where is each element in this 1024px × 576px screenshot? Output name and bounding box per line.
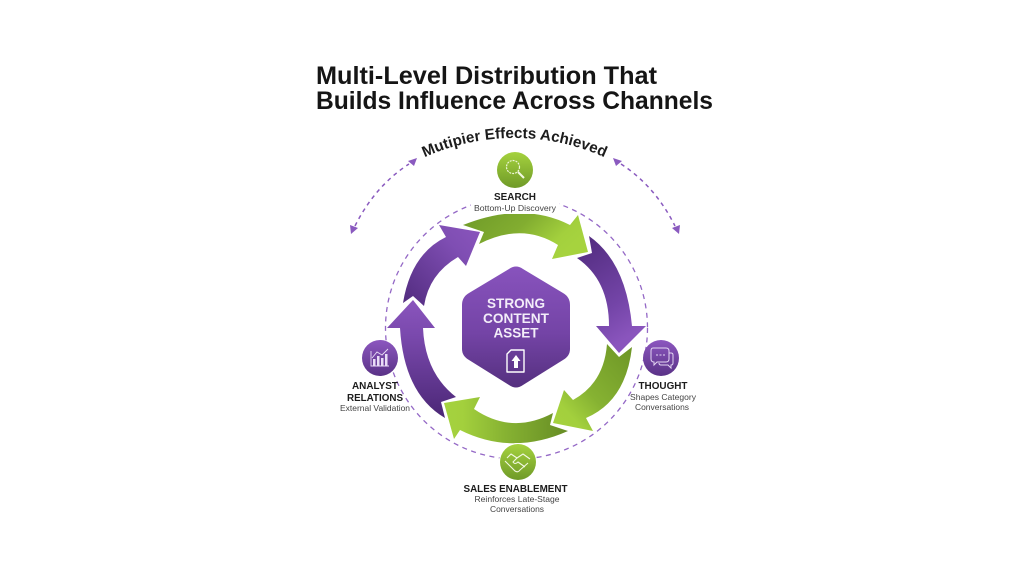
arrow: purple upper left, pointing up-right	[403, 225, 480, 306]
analyst description: External Validation	[340, 403, 410, 413]
icon: document upload	[507, 350, 524, 372]
panel: central hexagon	[462, 266, 570, 388]
title: Multi-Level Distribution That	[316, 62, 658, 90]
node: analyst relations	[340, 340, 410, 413]
node: search	[471, 152, 559, 214]
arrow: green top, pointing right	[463, 213, 588, 259]
arrow: green lower right, pointing down-left	[553, 344, 632, 431]
arrow: left double-headed dashed arc	[350, 158, 417, 234]
icon: magnifier	[497, 152, 533, 188]
search heading: SEARCH	[494, 192, 536, 203]
analyst heading	[347, 381, 403, 404]
sales heading: SALES ENABLEMENT	[464, 484, 568, 495]
arrow: green bottom, pointing left	[444, 397, 568, 443]
dashed orbit ring	[386, 197, 648, 459]
title	[316, 62, 713, 115]
node: thought	[630, 340, 697, 412]
icon: handshake	[500, 444, 536, 480]
analyst heading: ANALYST	[352, 381, 398, 392]
arrow: purple right, pointing down	[577, 236, 646, 353]
icon: chat bubbles	[643, 340, 679, 376]
arrow: right double-headed dashed arc	[613, 158, 680, 234]
sales description: Conversations	[490, 504, 544, 514]
sales description: Reinforces Late-Stage	[474, 494, 560, 504]
hexagon label	[483, 295, 549, 340]
analyst heading: RELATIONS	[347, 393, 403, 404]
hexagon label: STRONG	[487, 295, 545, 311]
cycle arrows	[387, 213, 646, 443]
curved heading: Mutipier Effects Achieved	[422, 127, 608, 157]
thought description: Shapes Category	[630, 392, 697, 402]
arrow: purple left, pointing up	[387, 300, 456, 418]
thought heading: THOUGHT	[638, 381, 688, 392]
hexagon label: CONTENT	[483, 310, 549, 326]
thought description	[630, 392, 697, 412]
node: sales enablement	[464, 444, 568, 514]
thought description: Conversations	[635, 402, 689, 412]
title: Builds Influence Across Channels	[316, 87, 713, 115]
icon: bar chart	[362, 340, 398, 376]
hexagon label: ASSET	[494, 324, 539, 340]
sales description	[474, 494, 560, 514]
search description: Bottom-Up Discovery	[474, 203, 557, 213]
